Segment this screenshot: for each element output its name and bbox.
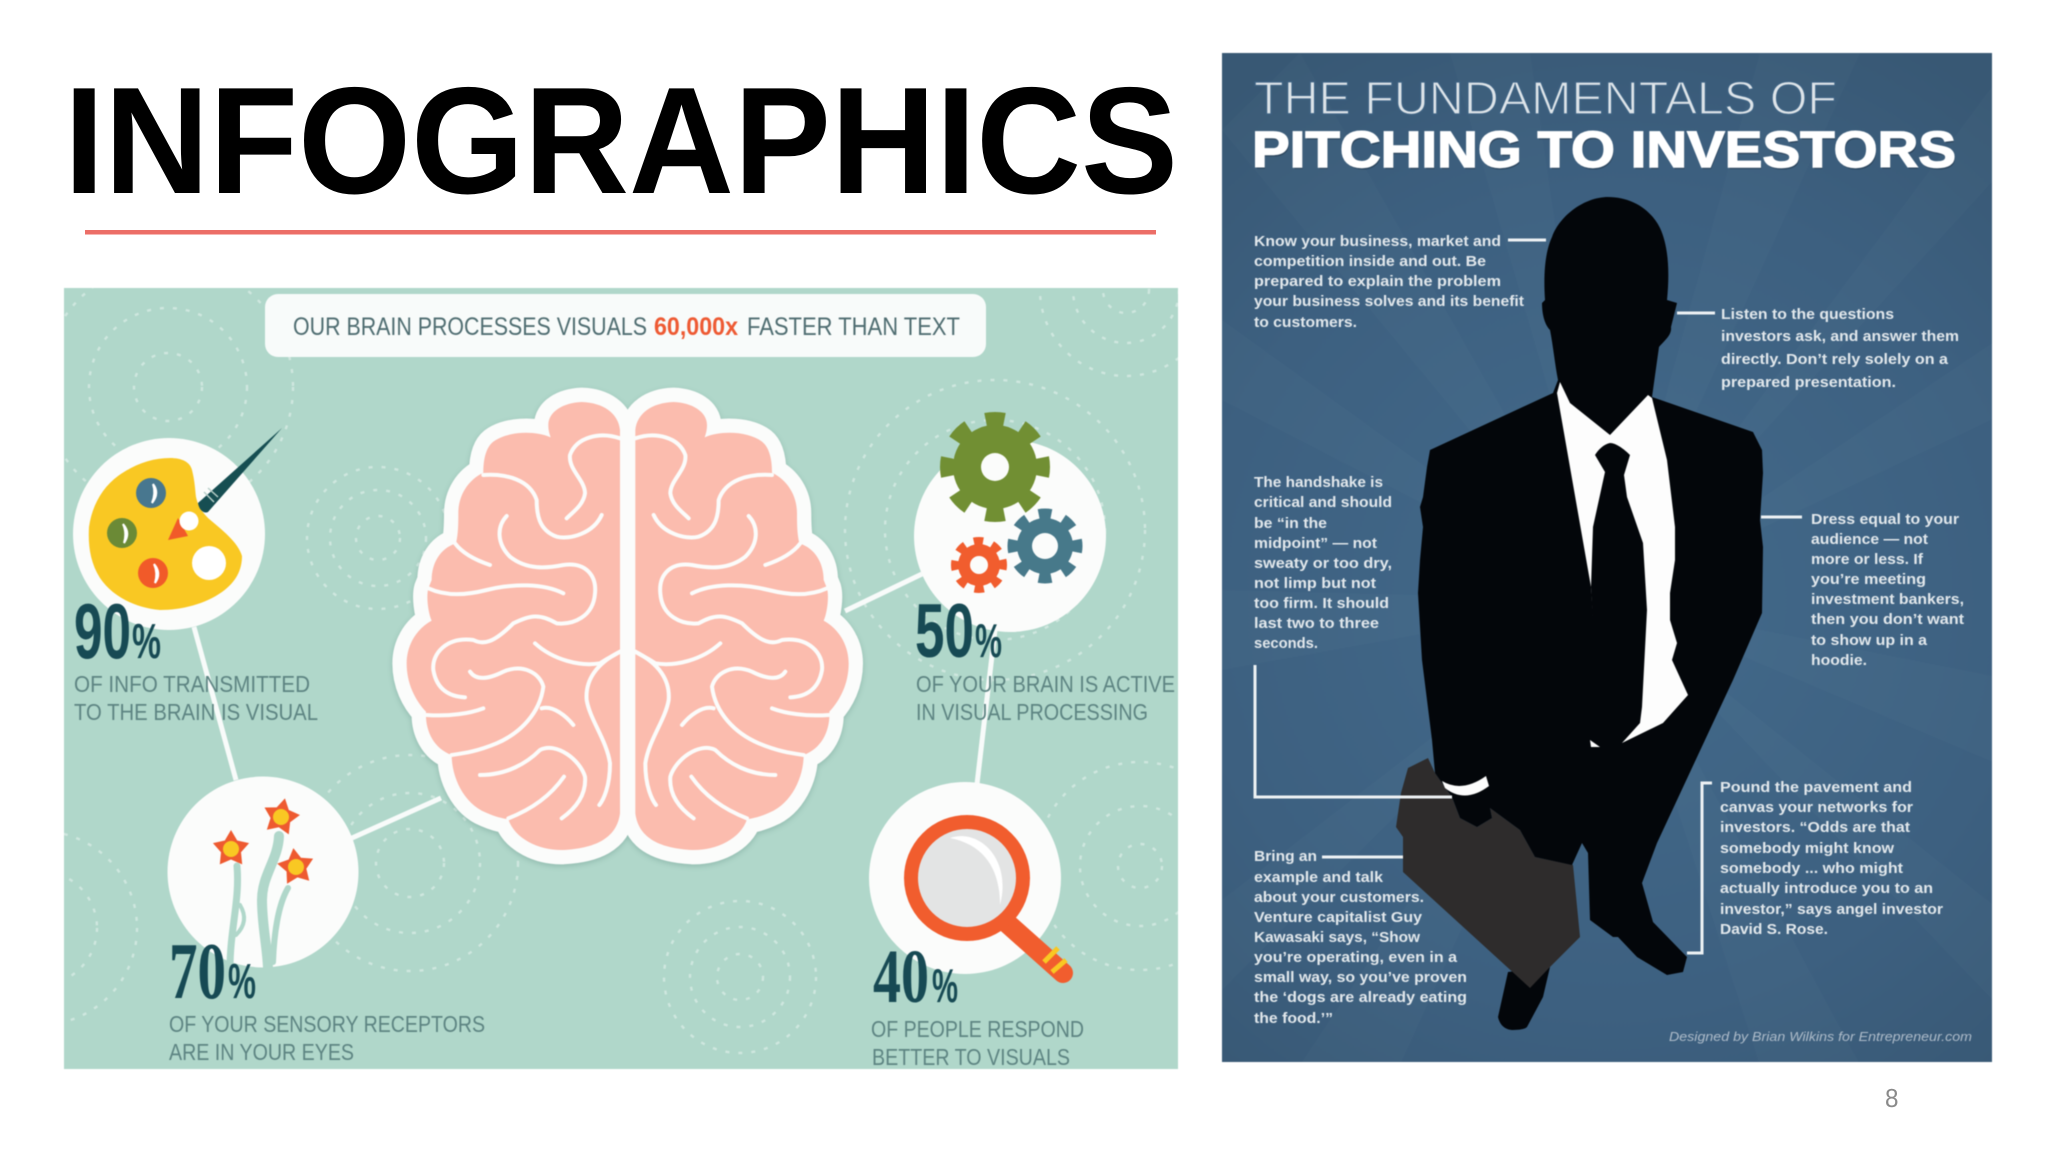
stat: 70 percent with flowers icon: OF YOUR SENSORY RECEPTORS [169, 1011, 485, 1037]
headline pill: 60,000x [654, 313, 738, 341]
text: the handshake: critical and should [1254, 495, 1392, 511]
text: pound the pavement: investors. “Odds are that [1720, 820, 1910, 836]
text: listen to the questions [1721, 307, 1959, 391]
text: bring an example: Bring an [1254, 849, 1317, 865]
text: pound the pavement: canvas your networks for [1720, 800, 1913, 816]
icon: magnifying glass [911, 822, 1066, 973]
text: the handshake: last two to three [1254, 616, 1379, 632]
text: pound the pavement: somebody might know [1720, 841, 1895, 857]
text: pound the pavement: Pound the pavement and [1720, 780, 1912, 796]
text: pound the pavement: David S. Rose. [1720, 922, 1828, 938]
text: bring an example [1254, 849, 1467, 1027]
text: dress equal: Dress equal to your [1811, 512, 1959, 528]
stat: 70 percent with flowers icon: 70 [169, 928, 226, 1016]
headline pill [265, 294, 986, 357]
briefcase [1396, 758, 1580, 988]
text: know your business: prepared to explain the problem [1254, 274, 1501, 290]
page number: 8 [1885, 1083, 1898, 1113]
text: the handshake: not limp but not [1254, 576, 1376, 592]
text: bring an example: Venture capitalist Guy [1254, 910, 1422, 926]
text: dress equal: to show up in a [1811, 633, 1928, 649]
text: know your business: to customers. [1254, 315, 1357, 331]
text: bring an example: Kawasaki says, “Show [1254, 930, 1421, 946]
text: the handshake: midpoint” — not [1254, 536, 1377, 552]
text: know your business [1254, 234, 1524, 331]
text: dress equal: audience — not [1811, 532, 1928, 548]
text: dress equal: you’re meeting [1811, 572, 1926, 588]
text: the handshake: The handshake is [1254, 475, 1383, 491]
text: bring an example: the ‘dogs are already eating [1254, 990, 1467, 1006]
text: bring an example: example and talk [1254, 870, 1384, 886]
stat: 50 percent with gears icon [914, 419, 1175, 725]
title: INFOGRAPHICS [64, 56, 1178, 226]
stat: 90 percent with palette icon: 90 [74, 587, 131, 675]
text: bring an example: the food.’” [1254, 1011, 1333, 1027]
heading [1252, 72, 1957, 180]
connector lines [194, 574, 995, 838]
brain illustration [407, 402, 849, 850]
text: the handshake: sweaty or too dry, [1254, 556, 1392, 572]
stat: 40 percent with magnifier icon: BETTER TO VISUALS [872, 1044, 1070, 1070]
stat: 40 percent with magnifier icon: % [932, 959, 958, 1012]
text: know your business: competition inside and out. Be [1254, 254, 1486, 270]
stat: 90 percent with palette icon [73, 428, 318, 725]
left shoe [1498, 967, 1550, 1030]
shirt cuff [1442, 776, 1489, 796]
stat: 50 percent with gears icon: OF YOUR BRAIN IS ACTIVE [916, 671, 1175, 697]
necktie [1591, 443, 1647, 747]
stat: 70 percent with flowers icon [168, 776, 485, 1065]
text: pound the pavement [1720, 780, 1943, 938]
stat: 50 percent with gears icon: % [975, 614, 1002, 667]
text: listen to the questions: prepared presentation. [1721, 375, 1896, 391]
stat: 40 percent with magnifier icon: OF PEOPLE RESPOND [871, 1016, 1084, 1042]
text: listen to the questions: investors ask, and answer them [1721, 329, 1959, 345]
heading: PITCHING TO INVESTORS [1252, 121, 1956, 178]
stat: 90 percent with palette icon: TO THE BRAIN IS VISUAL [74, 699, 318, 725]
text: the handshake [1254, 475, 1392, 652]
silhouette of businessman [1396, 197, 1763, 1030]
title underline [85, 230, 1156, 234]
text: dress equal: more or less. If [1811, 552, 1923, 568]
text: bring an example: small way, so you’ve proven [1254, 970, 1467, 986]
stat: 50 percent with gears icon: 50 [915, 589, 974, 674]
stat: 70 percent with flowers icon: % [228, 955, 256, 1009]
headline pill: FASTER THAN TEXT [747, 313, 960, 341]
text: bring an example: you’re operating, even in a [1254, 950, 1458, 966]
text: know your business: Know your business, market and [1254, 234, 1501, 250]
stat: 70 percent with flowers icon: ARE IN YOUR EYES [169, 1039, 354, 1065]
text: dress equal: hoodie. [1811, 653, 1867, 669]
panel: brain visuals infographic [64, 288, 1178, 1070]
text: the handshake: seconds. [1254, 636, 1318, 652]
icon: paint palette [89, 428, 282, 610]
text: dress equal [1811, 512, 1964, 669]
panel: pitching to investors infographic [1222, 53, 2012, 1065]
text: pound the pavement: investor,” says angel investor [1720, 902, 1943, 918]
stat: 40 percent with magnifier icon: 40 [873, 935, 929, 1019]
icon: flowers [213, 795, 316, 968]
text: listen to the questions: directly. Don’t rely solely on a [1721, 352, 1949, 368]
suit body [1418, 197, 1763, 975]
text: the handshake: too firm. It should [1254, 596, 1389, 612]
text: bring an example: about your customers. [1254, 890, 1424, 906]
text: know your business: your business solves and its benefit [1254, 294, 1524, 310]
text: dress equal: investment bankers, [1811, 592, 1964, 608]
text: pound the pavement: somebody ... who might [1720, 861, 1903, 877]
designer credit: Designed by Brian Wilkins for Entrepreneur.com [1669, 1030, 1972, 1044]
text: dress equal: then you don’t want [1811, 612, 1964, 628]
text: pound the pavement: actually introduce you to an [1720, 881, 1933, 897]
headline pill: OUR BRAIN PROCESSES VISUALS [293, 313, 647, 341]
heading: THE FUNDAMENTALS OF [1254, 72, 1837, 124]
icon: gears [947, 419, 1077, 589]
callout lines [1255, 240, 1802, 953]
shirt [1557, 382, 1688, 743]
stat: 90 percent with palette icon: % [132, 615, 161, 669]
stat: 50 percent with gears icon: IN VISUAL PROCESSING [916, 699, 1148, 725]
text: the handshake: be “in the [1254, 516, 1327, 532]
text: listen to the questions: Listen to the questions [1721, 307, 1894, 323]
heading: PITCHING TO INVESTORS [1253, 123, 1957, 180]
stat: 40 percent with magnifier icon [869, 782, 1084, 1070]
stat: 90 percent with palette icon: OF INFO TRANSMITTED [74, 671, 310, 697]
